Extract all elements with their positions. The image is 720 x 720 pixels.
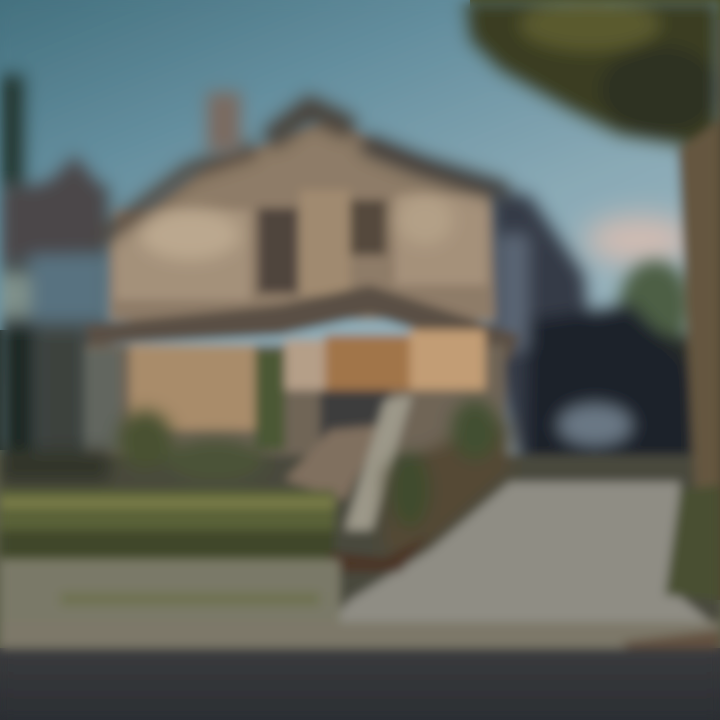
grass at trunk base <box>665 485 720 600</box>
neighbouring house at left <box>0 75 110 475</box>
front lawn hedge <box>0 490 335 560</box>
chimney <box>207 92 241 152</box>
front steps <box>285 395 412 530</box>
tree canopy <box>465 0 720 170</box>
background trees at right <box>600 260 700 475</box>
foreground tree <box>465 0 720 600</box>
house walls <box>110 120 495 320</box>
red mulch bed <box>330 535 430 572</box>
upper windows <box>258 200 386 293</box>
ground floor <box>85 330 505 455</box>
pavement <box>0 622 720 650</box>
porch post and climbing plant <box>255 350 285 450</box>
roof <box>105 108 500 235</box>
tree trunk <box>678 120 720 490</box>
ground base <box>0 455 720 650</box>
pink horizon glow <box>585 216 695 264</box>
road <box>0 648 720 720</box>
driveway <box>310 482 720 645</box>
main house <box>85 92 690 470</box>
sky <box>0 0 720 520</box>
porch roof <box>85 285 520 360</box>
shrubs beside steps <box>0 400 510 555</box>
garage wing <box>490 190 690 470</box>
kerb at right <box>620 630 720 672</box>
grass verge <box>0 560 340 626</box>
